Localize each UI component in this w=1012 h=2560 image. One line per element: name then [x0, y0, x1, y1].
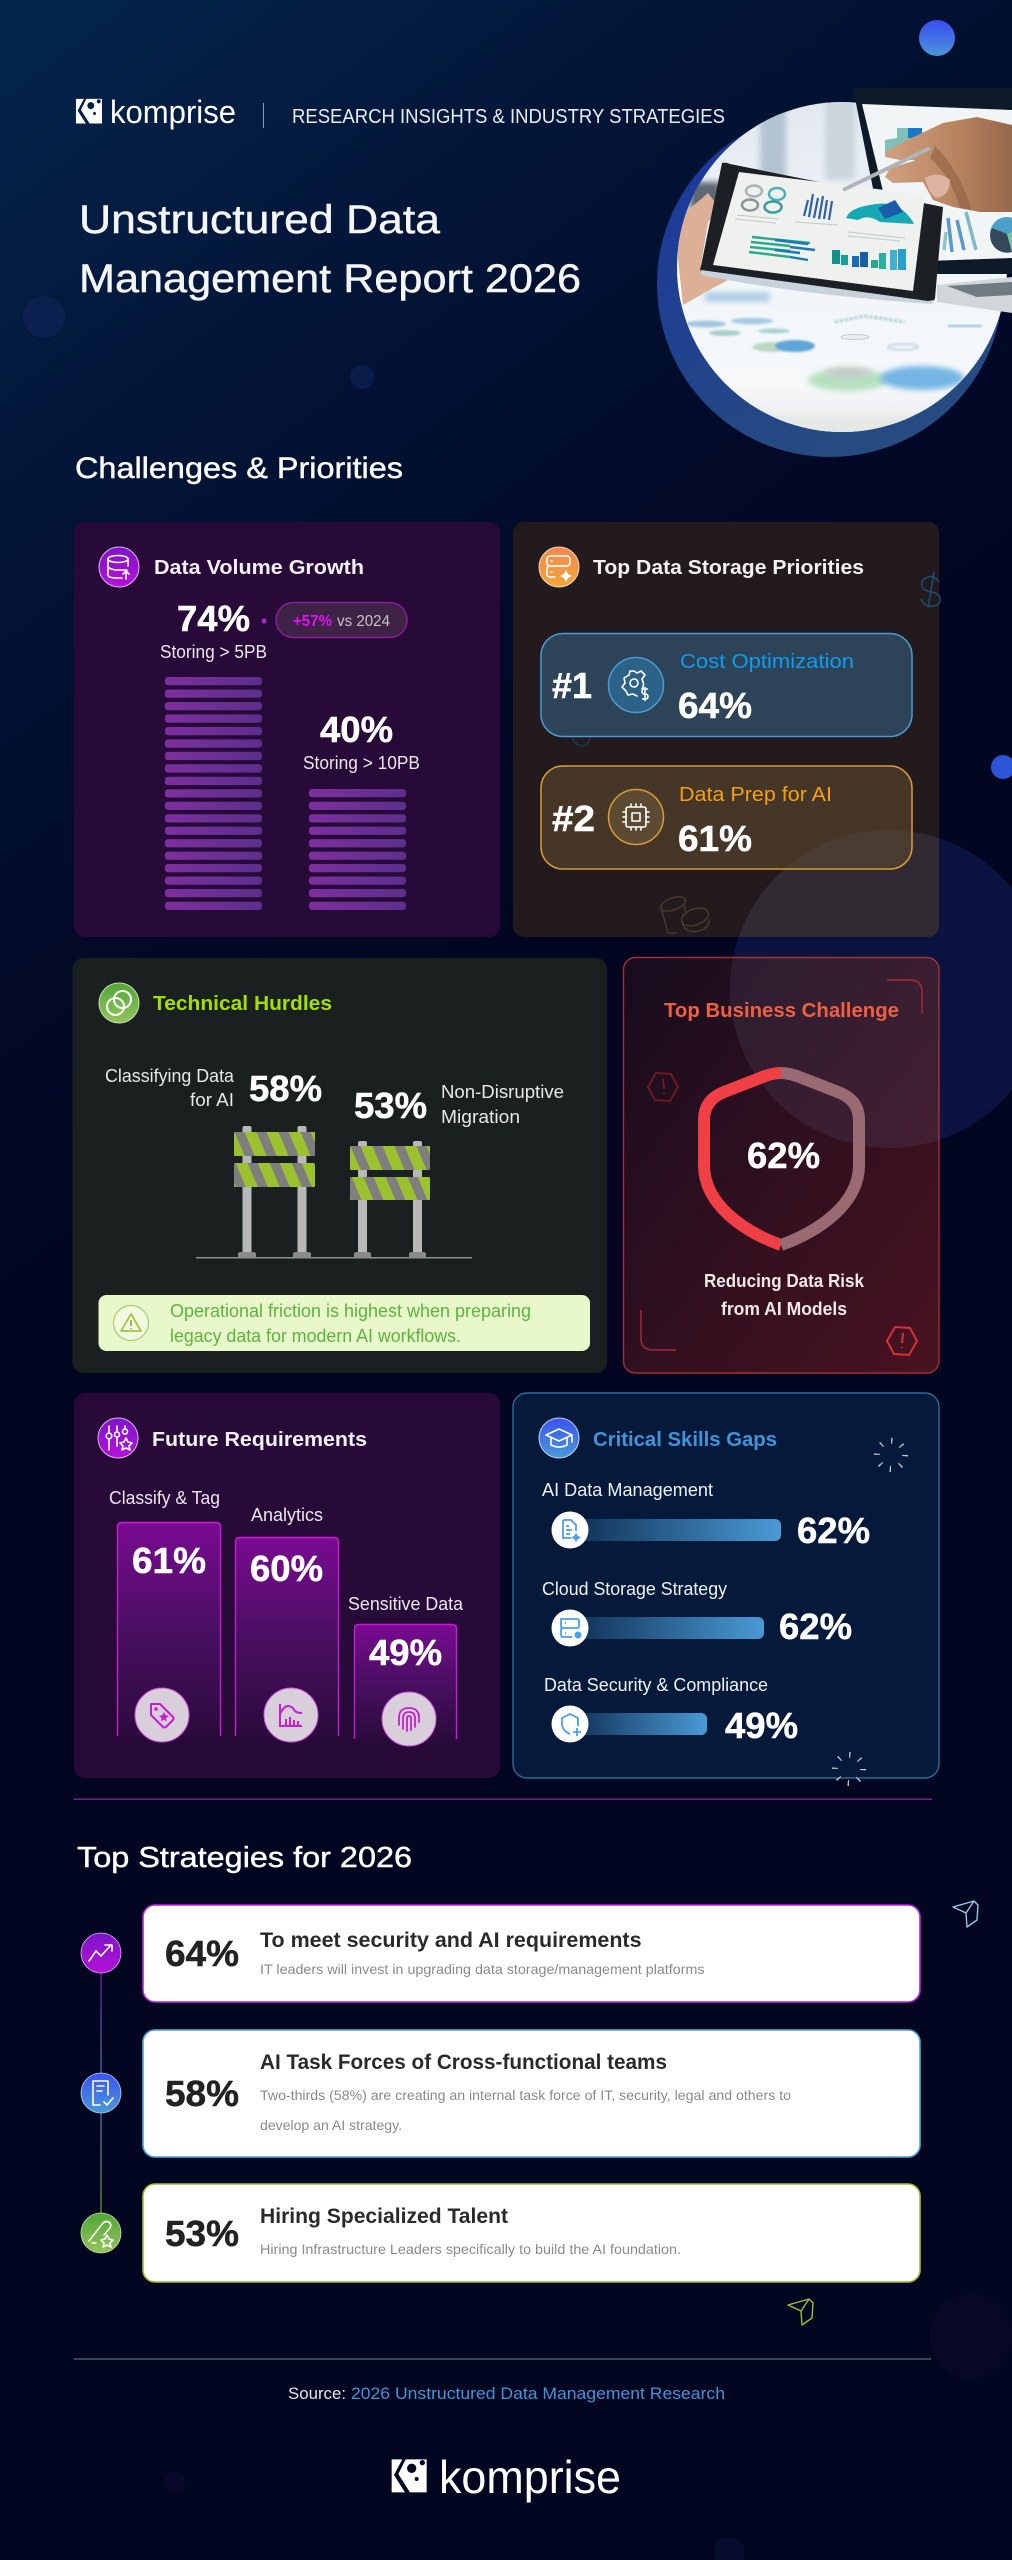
callout text: [170, 1301, 531, 1346]
description: [704, 1271, 865, 1319]
icon: cost gear: [608, 658, 664, 712]
icon: shield plus: [552, 1706, 588, 1742]
panel: Critical Skills Gaps: [513, 1393, 939, 1778]
icon: tag: [135, 1688, 189, 1742]
skill: Data Security & Compliance: Data Security & Compliance: [544, 1675, 768, 1695]
skill: Cloud Storage Strategy: 62%: [779, 1606, 852, 1647]
label: non-disruptive migration: Migration: [441, 1107, 520, 1127]
skill: AI Data Management: AI Data Management: [542, 1480, 713, 1500]
card: 58% AI task forces: AI Task Forces of Cross-functional teams: [260, 2051, 667, 2074]
title: Management Report 2026: [79, 257, 581, 301]
icon: graduation cap: [539, 1418, 579, 1458]
heading: Technical Hurdles: [153, 993, 332, 1015]
card: 64% security and AI: [143, 1905, 920, 2002]
skill: Cloud Storage Strategy: [542, 1579, 852, 1647]
label: classifying data: [105, 1066, 235, 1110]
skill: AI Data Management: [542, 1480, 870, 1551]
header tagline: RESEARCH INSIGHTS & INDUSTRY STRATEGIES: [292, 106, 725, 128]
source line: 2026 Unstructured Data Management Research: [351, 2384, 725, 2403]
title: [79, 198, 581, 301]
value: 64%: [678, 685, 752, 726]
badge: +57% vs 2024: vs 2024: [337, 613, 390, 630]
bar: Sensitive Data: [348, 1594, 464, 1746]
bar: Analytics: [236, 1505, 338, 1742]
barrier: 53%: [350, 1141, 430, 1257]
card: 53% specialized talent: Hiring Infrastructure Leaders specifically to build the AI foundation.: [260, 2241, 681, 2257]
decorative dot: right edge: [991, 755, 1012, 779]
panel: Data Volume Growth: [74, 522, 500, 937]
heading: Future Requirements: [152, 1429, 367, 1451]
bar: Analytics: Analytics: [251, 1505, 323, 1525]
label: Cost Optimization: [680, 651, 854, 673]
heading: Challenges & Priorities: Challenges & Priorities: [75, 452, 403, 485]
timeline icon: trend: [81, 1933, 121, 1973]
bar: Classify & Tag: Classify & Tag: [109, 1488, 220, 1508]
label: classifying data: Classifying Data: [105, 1066, 235, 1086]
decorative sparkle: top: [877, 1441, 905, 1469]
description: from AI Models: [721, 1299, 847, 1319]
chart: shield gauge: [704, 1073, 859, 1245]
icon: alert hexagon: [887, 1327, 917, 1355]
card: 53% specialized talent: [143, 2184, 920, 2282]
decorative coins: [659, 894, 711, 933]
decorative dollar: [921, 572, 940, 608]
callout: operational friction: [98, 1295, 590, 1351]
card: 58% AI task forces: develop an AI strategy.: [260, 2117, 402, 2133]
description: Reducing Data Risk: [704, 1271, 865, 1291]
card: 64% security and AI: To meet security and AI requirements: [260, 1929, 642, 1952]
panel: Future Requirements: [74, 1393, 500, 1778]
panel: Top Business Challenge: [622, 956, 940, 1374]
label: Storing > 5PB: [160, 642, 267, 662]
arrow: decorative blue: [953, 1901, 978, 1927]
icon: linked rings: [99, 983, 139, 1023]
stat: 58%: 58%: [249, 1068, 322, 1109]
card: 58% AI task forces: [143, 2030, 920, 2157]
barrier: 58%: [234, 1126, 315, 1257]
logo: komprise header: komprise: [110, 94, 236, 130]
stat: 40%: 40%: [320, 709, 393, 750]
stacked bar: 40%: [309, 789, 406, 910]
callout text: legacy data for modern AI workflows.: [170, 1326, 461, 1346]
header divider: [263, 103, 264, 128]
card: 53% specialized talent: 53%: [165, 2213, 239, 2254]
callout text: Operational friction is highest when preparing: [170, 1301, 531, 1321]
bar: Sensitive Data: Sensitive Data: [348, 1594, 464, 1614]
label: classifying data: for AI: [190, 1090, 234, 1110]
card: 64% security and AI: 64%: [165, 1933, 239, 1974]
stat: 53%: 53%: [354, 1085, 427, 1126]
bar: Sensitive Data: 49%: [369, 1632, 442, 1673]
heading: Top Strategies for 2026: Top Strategies for 2026: [77, 1842, 412, 1874]
arrow: decorative green: [788, 2299, 813, 2325]
card: 58% AI task forces: Two-thirds (58%) are creating an internal task force of IT, security, legal and others to: [260, 2087, 791, 2103]
decorative sparkle: bottom: [835, 1755, 863, 1783]
icon: warning: [114, 1306, 148, 1340]
badge: +57% vs 2024: [276, 602, 407, 638]
skill: AI Data Management: 62%: [797, 1510, 870, 1551]
icon: fingerprint: [382, 1692, 436, 1746]
card: #1 Cost Optimization: [541, 634, 912, 736]
logo: komprise footer: komprise: [439, 2451, 621, 2503]
ground line: [196, 1257, 472, 1258]
source line: Source:: [288, 2384, 346, 2403]
bar: Classify & Tag: 61%: [132, 1540, 206, 1581]
card: 53% specialized talent: Hiring Specialized Talent: [260, 2205, 508, 2228]
label: non-disruptive migration: [441, 1082, 564, 1127]
bar: Analytics: 60%: [250, 1548, 323, 1589]
timeline icon: checklist: [81, 2073, 121, 2113]
stat: 74%: 74%: [177, 598, 250, 639]
bar: Classify & Tag: [109, 1488, 220, 1742]
card: 64% security and AI: IT leaders will invest in upgrading data storage/management platforms: [260, 1961, 704, 1977]
icon: document: [552, 1512, 588, 1548]
icon: alert hexagon faint: [648, 1073, 678, 1101]
skill: Cloud Storage Strategy: Cloud Storage Strategy: [542, 1579, 727, 1599]
title: Unstructured Data: [79, 198, 441, 242]
rank: #2: [552, 798, 595, 839]
stacked bar: 74%: [165, 677, 262, 910]
badge: +57% vs 2024: +57%: [293, 613, 332, 630]
icon: database growth: [99, 547, 139, 587]
heading: Data Volume Growth: [154, 557, 364, 579]
heading: Top Business Challenge: [664, 1000, 899, 1022]
heading: Top Data Storage Priorities: [593, 557, 864, 579]
icon: analytics chart: [264, 1688, 318, 1742]
value: 61%: [678, 818, 752, 859]
value: 62%: [747, 1135, 820, 1176]
icon: storage sparkle: [539, 547, 579, 587]
skill: Data Security & Compliance: 49%: [725, 1705, 798, 1746]
label: Data Prep for AI: [679, 784, 832, 806]
card: #2 Data Prep for AI: [541, 766, 912, 869]
panel: Technical Hurdles: [72, 956, 979, 2502]
heading: Critical Skills Gaps: [593, 1429, 777, 1451]
hero photo: tablet with charts in circle: [657, 88, 1012, 457]
timeline connector: [100, 1973, 102, 2213]
icon: AI chip: [608, 790, 664, 844]
card: 58% AI task forces: 58%: [165, 2073, 239, 2114]
label: non-disruptive migration: Non-Disruptive: [441, 1082, 564, 1102]
panel: Top Data Storage Priorities: [513, 522, 941, 937]
label: Storing > 10PB: [303, 753, 420, 773]
timeline icon: talent: [81, 2213, 121, 2253]
icon: sliders star: [98, 1418, 138, 1458]
skill: Data Security & Compliance: [544, 1675, 798, 1746]
rank: #1: [552, 665, 592, 706]
decorative dot: top right: [919, 20, 955, 56]
icon: server: [552, 1610, 588, 1646]
